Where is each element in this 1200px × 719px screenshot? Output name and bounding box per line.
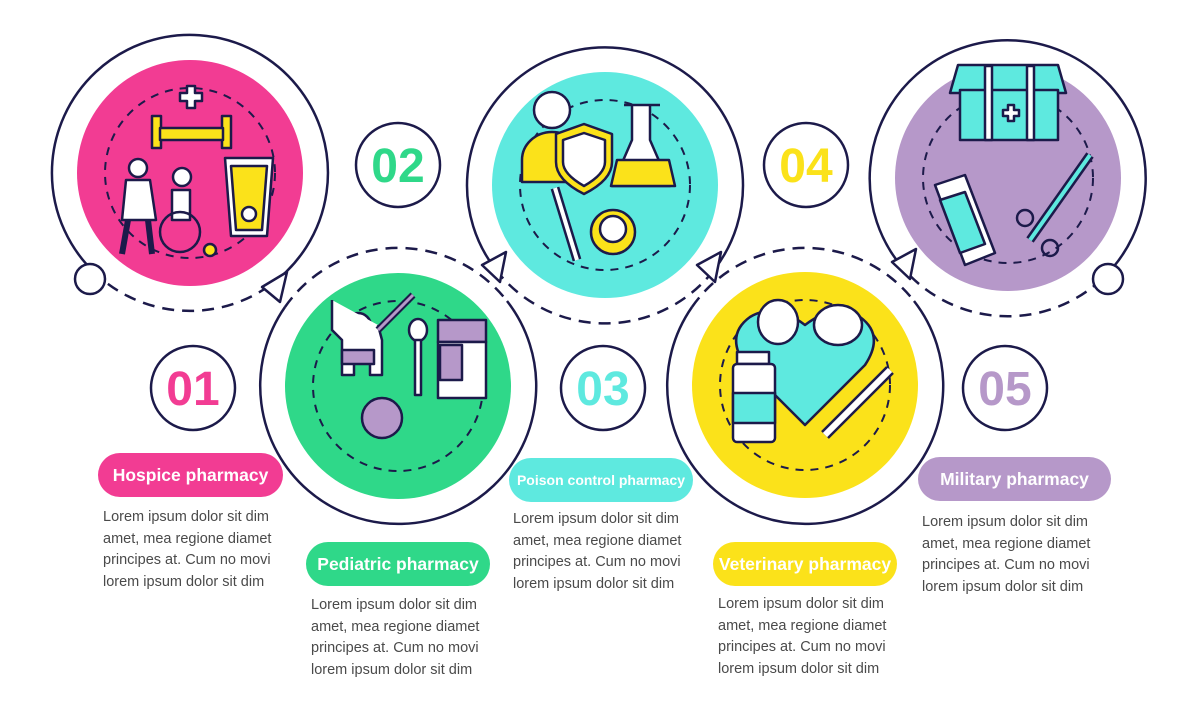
label: Veterinary pharmacy (713, 542, 897, 586)
icon: poison control (522, 92, 675, 260)
text: hospice: Lorem ipsum dolor sit dim amet, mea regione diamet principes at. Cum no movi lorem ipsum dolor sit dim (103, 509, 271, 590)
start/end small circles (75, 264, 1123, 294)
icon: pediatric (332, 295, 486, 438)
text: military: Lorem ipsum dolor sit dim amet, mea regione diamet principes at. Cum no movi lorem ipsum dolor sit dim (922, 514, 1090, 594)
text: poison: Lorem ipsum dolor sit dim amet, mea regione diamet principes at. Cum no movi lorem ipsum dolor sit dim (513, 511, 681, 592)
number 01: 01 (166, 363, 220, 416)
label: Poison control pharmacy: Poison control pharmacy (517, 472, 685, 488)
label: Pediatric pharmacy: Pediatric pharmacy (317, 554, 479, 574)
number 04: 04 (779, 140, 833, 193)
label: Poison control pharmacy (509, 458, 693, 502)
ring 5 (870, 40, 1146, 316)
text: veterinary: Lorem ipsum dolor sit dim amet, mea regione diamet principes at. Cum no movi lorem ipsum dolor sit dim (718, 596, 886, 676)
label: Hospice pharmacy (98, 453, 283, 497)
ring 1 (52, 35, 328, 311)
ring 4 (667, 248, 943, 524)
inner dashed circles (105, 88, 1093, 471)
label: Hospice pharmacy: Hospice pharmacy (113, 464, 268, 484)
number 02: 02 (371, 140, 425, 193)
number circles (151, 123, 1047, 430)
icon: veterinary (733, 300, 890, 442)
ring 3 (467, 47, 743, 323)
disks (77, 60, 303, 286)
icon: hospice (122, 86, 273, 256)
label: Veterinary pharmacy: Veterinary pharmacy (719, 554, 891, 574)
text: pediatric: Lorem ipsum dolor sit dim amet, mea regione diamet principes at. Cum no movi lorem ipsum dolor sit dim (311, 597, 479, 678)
label: Military pharmacy: Military pharmacy (940, 468, 1089, 488)
ring 2 (260, 248, 536, 524)
number 03: 03 (576, 363, 630, 416)
number 05: 05 (978, 363, 1032, 416)
arrows (262, 249, 916, 302)
label: Pediatric pharmacy (306, 542, 490, 586)
label: Military pharmacy (918, 457, 1111, 501)
icon: military (935, 65, 1090, 265)
